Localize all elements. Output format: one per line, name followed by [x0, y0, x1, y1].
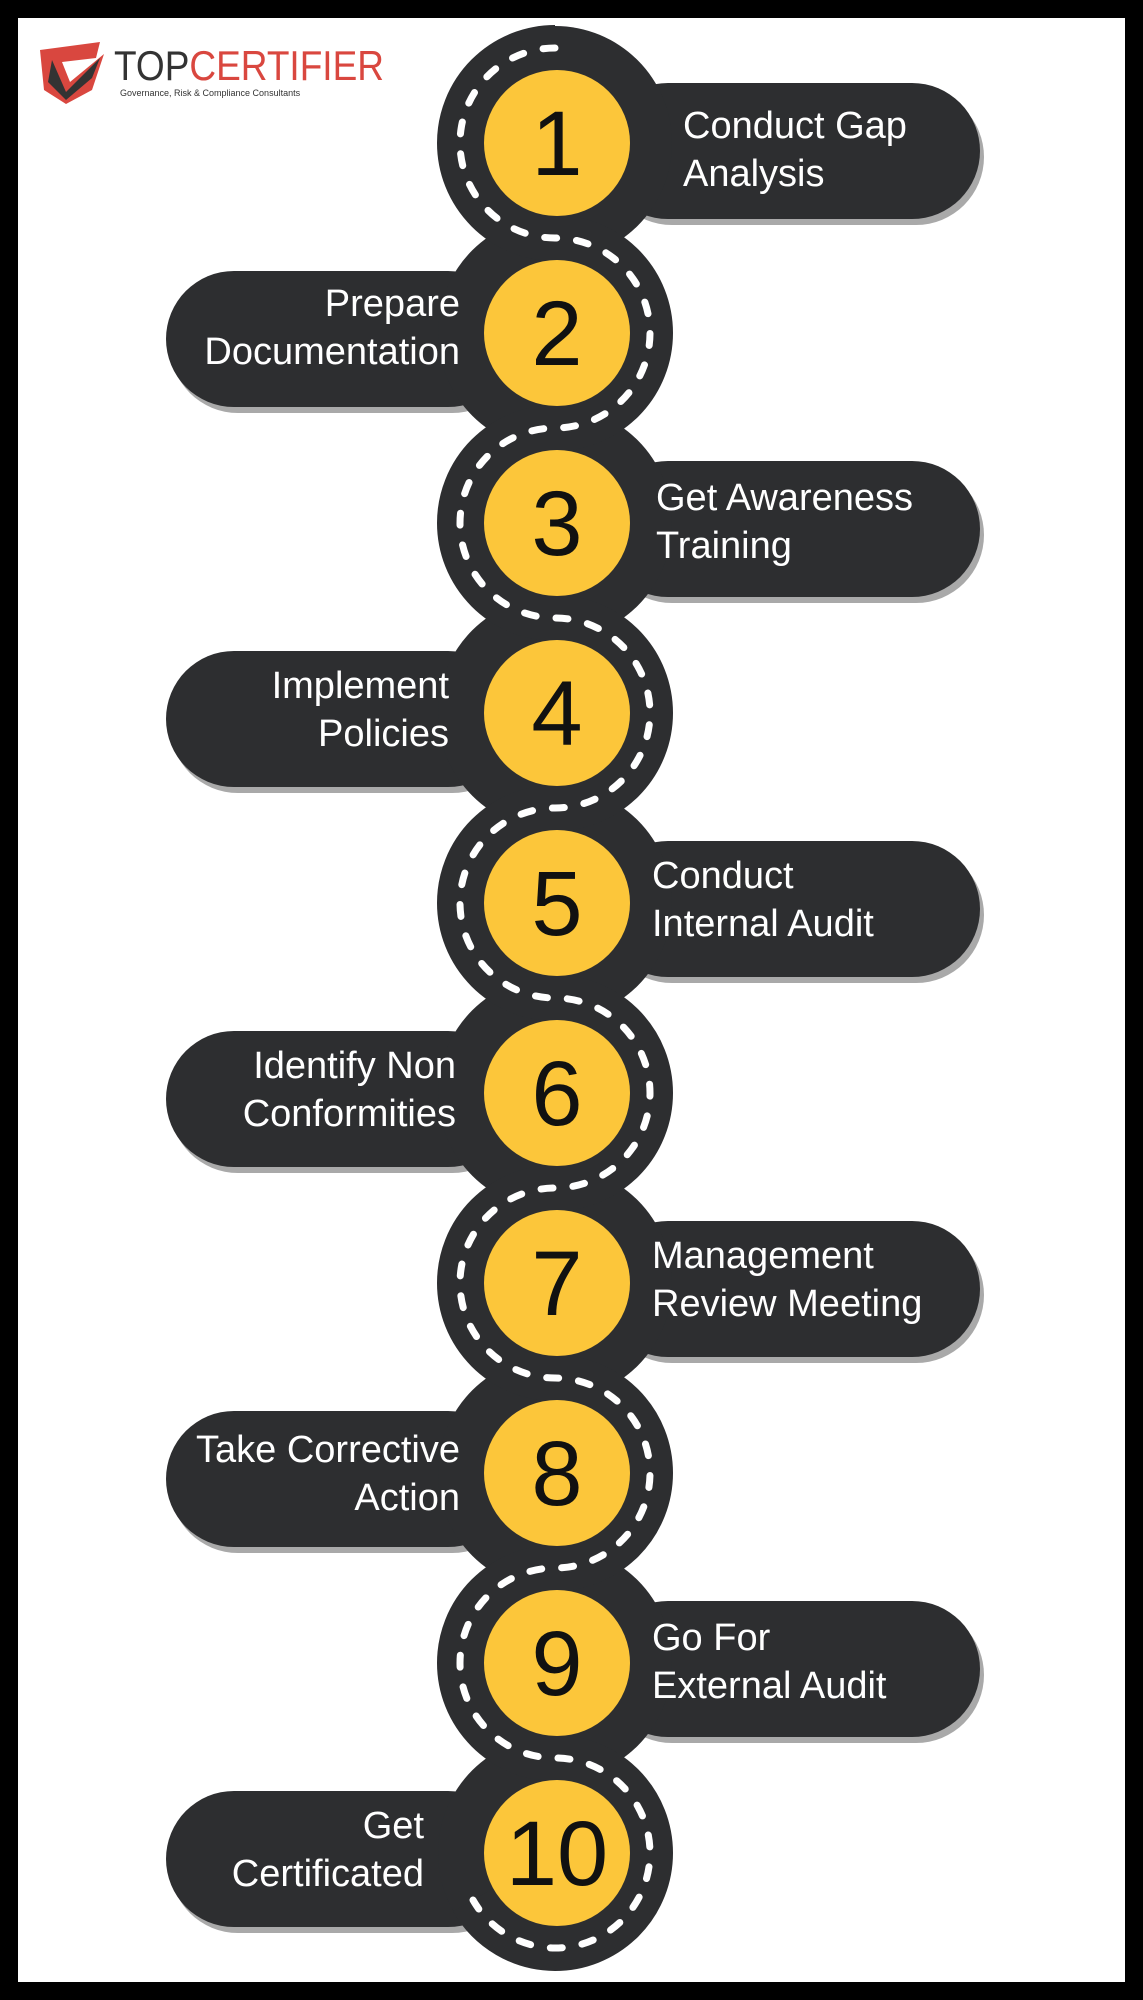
label 5: Internal Audit	[652, 903, 874, 945]
label 1: Analysis	[683, 153, 824, 195]
step circles	[484, 70, 630, 1926]
label 10: Get	[363, 1805, 424, 1847]
step labels	[196, 105, 922, 1895]
road	[438, 26, 672, 1970]
step numbers: 1	[531, 93, 583, 195]
label 9: Go For	[652, 1617, 770, 1659]
label 4: Policies	[318, 713, 449, 755]
label 9: External Audit	[652, 1665, 887, 1707]
tagline: Governance, Risk & Compliance Consultants	[120, 88, 301, 98]
label 2: Prepare	[325, 283, 460, 325]
step numbers: 6	[531, 1043, 583, 1145]
label 6: Identify Non	[253, 1045, 456, 1087]
label 5: Conduct	[652, 855, 794, 897]
step numbers: 9	[531, 1613, 583, 1715]
step numbers: 5	[531, 853, 583, 955]
step numbers: 3	[531, 473, 583, 575]
label 7: Management	[652, 1235, 874, 1277]
logo text: TOPCERTIFIER	[114, 42, 384, 89]
label 3: Get Awareness	[656, 477, 913, 519]
label 3: Training	[656, 525, 792, 567]
icon: shield	[40, 42, 104, 104]
label 10: Certificated	[232, 1853, 424, 1895]
step numbers: 4	[531, 663, 583, 765]
step numbers: 8	[531, 1423, 583, 1525]
label 8: Take Corrective	[196, 1429, 460, 1471]
label 4: Implement	[272, 665, 449, 707]
label 2: Documentation	[204, 331, 460, 373]
step numbers: 7	[531, 1233, 583, 1335]
label 7: Review Meeting	[652, 1283, 922, 1325]
step numbers: 2	[531, 283, 583, 385]
label 8: Action	[354, 1477, 460, 1519]
pills with shadows	[166, 83, 984, 1933]
step numbers	[506, 93, 608, 1905]
label 6: Conformities	[243, 1093, 456, 1135]
step numbers: 10	[506, 1803, 608, 1905]
logo	[40, 42, 384, 104]
label 1: Conduct Gap	[683, 105, 907, 147]
